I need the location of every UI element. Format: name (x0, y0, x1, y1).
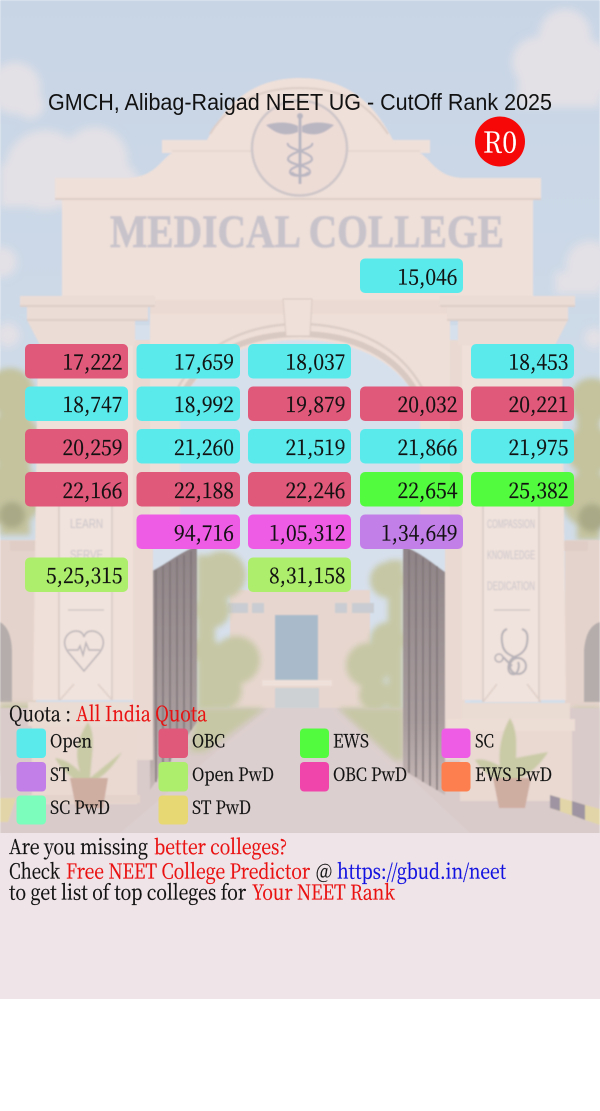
promo line 2 (9, 854, 506, 884)
ground and road (0, 708, 600, 838)
tile: 17,659 Open (136, 344, 240, 378)
icon: stethoscope (502, 629, 527, 674)
legend item: Open (16, 728, 92, 758)
tile: 20,221 OBC (471, 386, 574, 421)
legend item: EWS PwD: EWS PwD (475, 761, 552, 787)
promo line 2: https://gbud.in/neet (337, 854, 506, 884)
tile: 22,246 OBC (248, 472, 351, 506)
legend item: OBC (158, 728, 225, 758)
legend item: OBC PwD (300, 761, 407, 792)
tile: 22,654 EWS (360, 472, 463, 506)
title: GMCH, Alibag-Raigad NEET UG - CutOff Rank 2025 (48, 89, 552, 115)
tile: 1,34,649 ST (360, 514, 463, 549)
promo line 2: @ (316, 854, 332, 884)
tile: 25,382 EWS (471, 472, 574, 506)
tile: 22,654 EWS: 22,654 (398, 474, 458, 505)
tile: 20,259 OBC: 20,259 (62, 431, 122, 462)
tile: 21,866 Open: 21,866 (398, 431, 458, 462)
legend item: Open PwD: Open PwD (192, 761, 274, 787)
tile: 20,259 OBC (25, 429, 128, 464)
tile: 17,222 OBC (25, 344, 128, 378)
tile: 8,31,158 Open PwD: 8,31,158 (269, 559, 346, 590)
round badge: R0 (475, 116, 525, 166)
legend item: ST: ST (50, 761, 69, 787)
quota line: Quota : (9, 697, 71, 727)
tile: 5,25,315 Open PwD (25, 558, 128, 592)
left pillar (28, 340, 153, 804)
tile: 21,260 Open (136, 429, 240, 464)
tile: 22,166 OBC (25, 472, 128, 506)
tile: 5,25,315 Open PwD: 5,25,315 (46, 559, 122, 590)
tile: 18,453 Open (471, 344, 574, 378)
tile: 21,260 Open: 21,260 (174, 431, 234, 462)
tile: 21,975 Open (471, 429, 574, 464)
tile: 21,866 Open (360, 429, 463, 464)
tile: 17,222 OBC: 17,222 (62, 346, 122, 376)
promo line 2: Free NEET College Predictor (66, 854, 310, 884)
tile: 17,659 Open: 17,659 (174, 346, 234, 376)
tile: 21,519 Open: 21,519 (286, 431, 346, 462)
tile: 22,188 OBC (136, 472, 240, 506)
tile: 20,221 OBC: 20,221 (508, 388, 568, 419)
tile: 21,975 Open: 21,975 (508, 431, 568, 462)
legend item: Open PwD (158, 761, 274, 792)
legend item: SC PwD: SC PwD (50, 794, 110, 820)
far building (228, 590, 374, 715)
legend item: SC PwD (16, 794, 110, 824)
emblem: caduceus in circle (252, 100, 347, 196)
tile: 21,519 Open (248, 429, 351, 464)
tile: 94,716 SC (136, 514, 240, 549)
tile: 1,05,312 SC (248, 514, 351, 549)
legend item: SC: SC (475, 728, 494, 754)
tile: 22,246 OBC: 22,246 (286, 474, 346, 505)
promo line 3: to get list of top colleges for (9, 876, 246, 906)
planters (55, 718, 548, 808)
tile: 15,046 Open: 15,046 (398, 260, 458, 292)
background: medical college gate illustration (0, 0, 600, 840)
tile: 15,046 Open (360, 258, 463, 293)
clouds (0, 9, 600, 348)
promo line 2: Check (9, 854, 60, 884)
arch opening sky (130, 325, 470, 725)
legend item: EWS: EWS (333, 728, 369, 754)
tile: 20,032 OBC: 20,032 (398, 388, 458, 419)
round badge: R0: R0 (483, 120, 517, 162)
legend item: OBC PwD: OBC PwD (333, 761, 407, 787)
cornice and arch (20, 296, 575, 545)
tile: 1,34,649 ST: 1,34,649 (381, 516, 458, 548)
side walls (0, 540, 36, 740)
quota line: All India Quota (76, 697, 207, 727)
tile: 18,453 Open: 18,453 (508, 346, 568, 376)
tile: 18,992 Open: 18,992 (174, 388, 234, 419)
legend item: Open: Open (50, 728, 92, 754)
tile: 19,879 OBC (248, 386, 351, 421)
kerb stripes (0, 795, 600, 825)
right pillar (445, 340, 575, 801)
legend item: ST PwD (158, 794, 251, 824)
cutoff rank grid (25, 258, 574, 592)
tile: 1,05,312 SC: 1,05,312 (269, 516, 346, 548)
legend item: OBC: OBC (192, 728, 225, 754)
legend item: EWS (300, 728, 369, 758)
tile: 18,037 Open: 18,037 (286, 346, 346, 376)
tile: 22,166 OBC: 22,166 (62, 474, 122, 505)
tile: 25,382 EWS: 25,382 (508, 474, 568, 505)
tile: 18,747 Open (25, 386, 128, 421)
heading on gate: MEDICAL COLLEGE: MEDICAL COLLEGE (110, 206, 504, 258)
legend item: EWS PwD (442, 761, 552, 792)
legend item: ST (16, 761, 69, 792)
tile: 8,31,158 Open PwD (248, 558, 351, 592)
right pillar: COMPASSION (487, 517, 535, 531)
left pillar: LEARN (70, 516, 103, 531)
side trees (0, 368, 600, 540)
legend item: SC (442, 728, 494, 758)
gate leaves (150, 546, 445, 795)
tile: 18,992 Open (136, 386, 240, 421)
promo line 1: better colleges? (154, 830, 287, 860)
tile: 94,716 SC: 94,716 (174, 516, 234, 548)
tile: 18,037 Open (248, 344, 351, 378)
tile: 22,188 OBC: 22,188 (174, 474, 234, 505)
right pillar: KNOWLEDGE (487, 548, 535, 562)
legend (16, 728, 552, 824)
promo line 3: Your NEET Rank (252, 876, 395, 906)
gate pediment (55, 78, 541, 300)
promo line 1 (9, 830, 287, 860)
courtyard trees (191, 551, 406, 711)
tile: 19,879 OBC: 19,879 (286, 388, 346, 419)
right pillar: DEDICATION (487, 579, 535, 593)
quota line (9, 697, 207, 727)
tile: 18,747 Open: 18,747 (62, 388, 122, 419)
left pillar: SERVE (70, 547, 103, 562)
icon: heart with pulse (65, 631, 103, 671)
promo line 1: Are you missing (9, 830, 148, 860)
tile: 20,032 OBC (360, 386, 463, 421)
panel: college predictor promo (0, 830, 600, 999)
legend item: ST PwD: ST PwD (192, 794, 251, 820)
